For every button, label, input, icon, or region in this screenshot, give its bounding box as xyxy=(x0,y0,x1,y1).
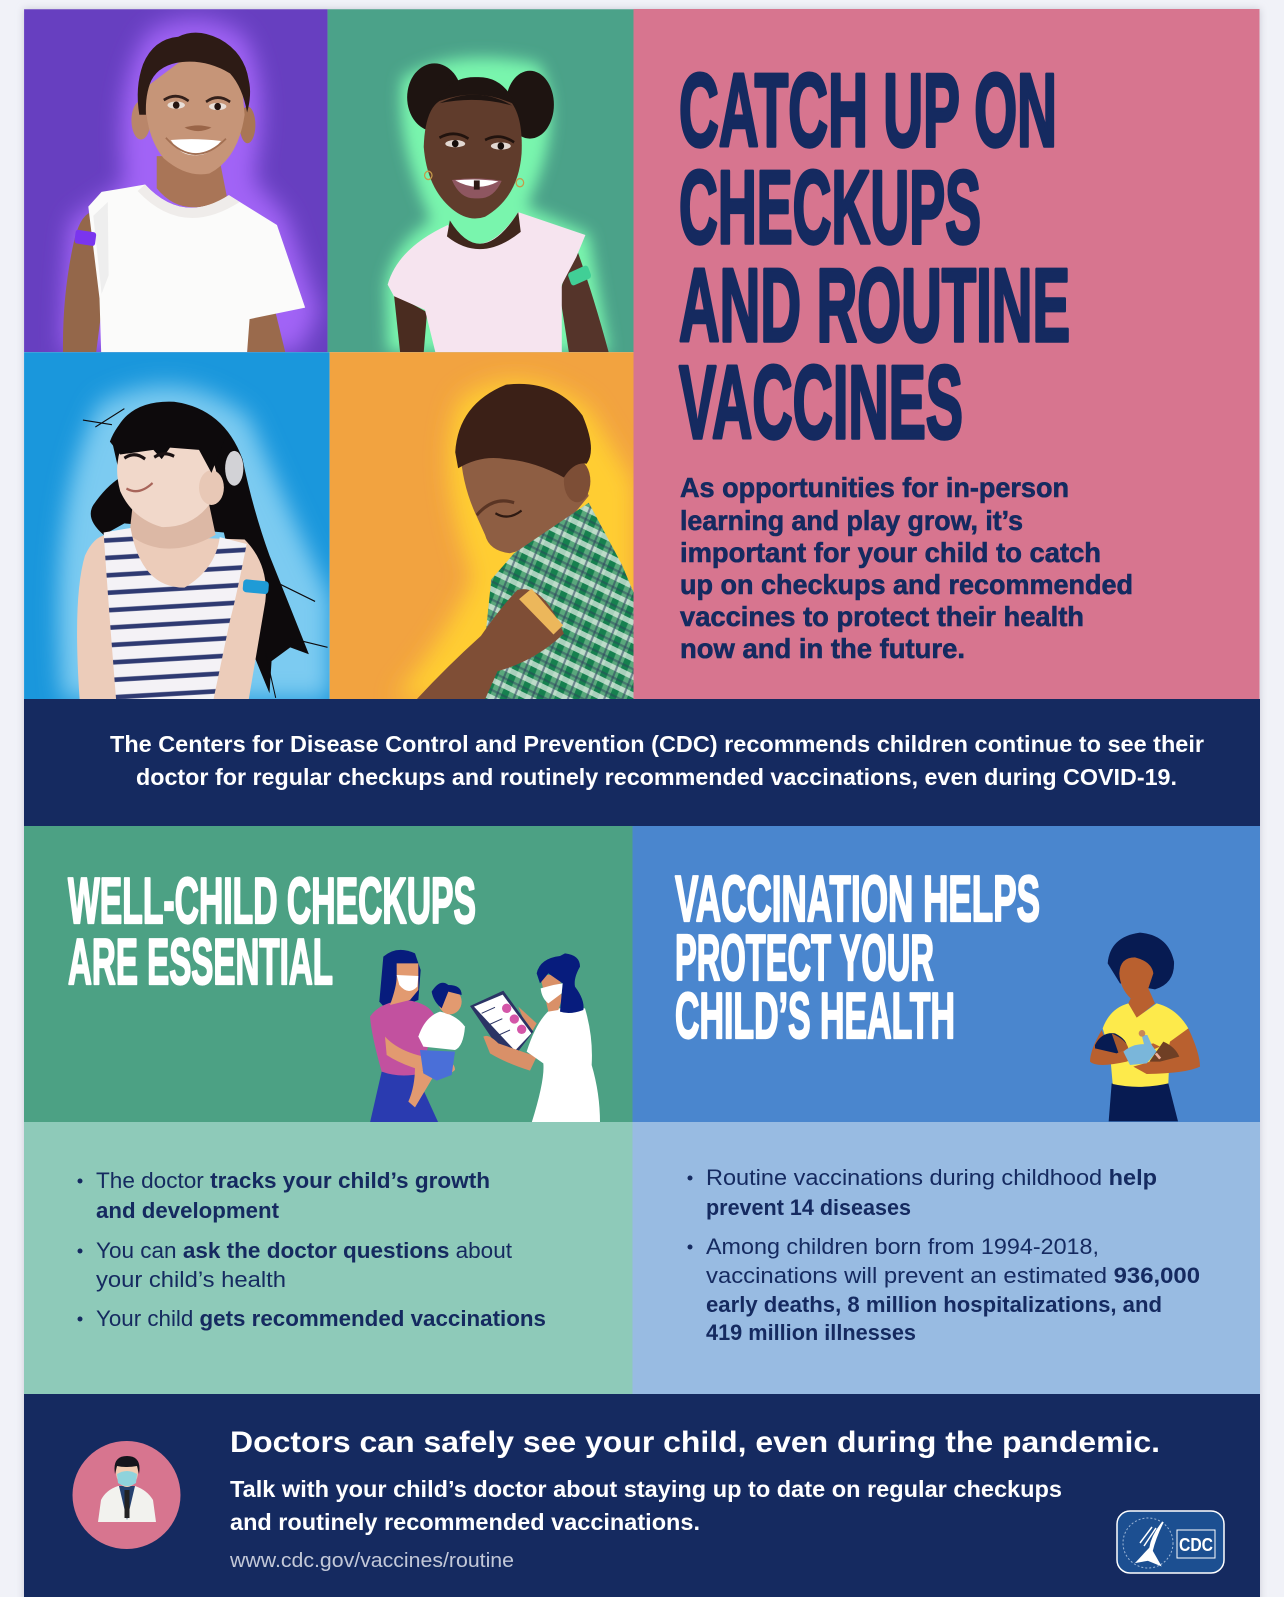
bullet list: checkups: The doctor tracks your child’s growth xyxy=(96,1168,490,1193)
closing message: Talk with your child’s doctor about staying up to date on regular checkups xyxy=(230,1476,1062,1502)
photo: girl with blue bandage xyxy=(24,352,330,699)
bullet list: vaccination: Routine vaccinations during childhood help xyxy=(706,1165,1157,1190)
photo: boy with purple bandage xyxy=(24,9,328,352)
recommendation text xyxy=(110,731,1204,790)
illustration: mother holding baby xyxy=(1090,933,1200,1121)
intro paragraph: learning and play grow, it’s xyxy=(680,505,1023,536)
heading: vaccination helps xyxy=(675,862,1040,1052)
photo: boy with yellow bandage xyxy=(330,352,634,699)
closing message: and routinely recommended vaccinations. xyxy=(230,1509,700,1535)
heading: well-child checkups: WELL-CHILD CHECKUPS xyxy=(68,864,476,937)
panel: CDC recommendation band xyxy=(24,699,1260,826)
closing message xyxy=(230,1476,1062,1535)
bullet list: vaccination: early deaths, 8 million hospitalizations, and xyxy=(706,1292,1162,1317)
panel: footer xyxy=(24,1394,1260,1597)
icon: masked doctor in pink circle xyxy=(72,1441,180,1549)
heading: vaccination helps: CHILD’S HEALTH xyxy=(675,979,955,1052)
recommendation text: doctor for regular checkups and routinely recommended vaccinations, even during COVID-19. xyxy=(136,764,1177,790)
bullet list: vaccination: prevent 14 diseases xyxy=(706,1195,911,1220)
title: VACCINES xyxy=(679,345,963,461)
bullet list: vaccination: Among children born from 1994-2018, xyxy=(706,1234,1099,1259)
panel: pink title background xyxy=(634,9,1260,699)
panel: checkup benefits list xyxy=(24,1122,632,1394)
intro paragraph: important for your child to catch xyxy=(680,537,1101,568)
logo: CDC: CDC xyxy=(1179,1535,1213,1555)
title xyxy=(679,53,1070,461)
heading: vaccination helps: PROTECT YOUR xyxy=(675,921,934,994)
panel: vaccination benefits list xyxy=(632,1122,1260,1394)
bullet list: checkups xyxy=(78,1168,546,1331)
recommendation text: The Centers for Disease Control and Prevention (CDC) recommends children continue to see their xyxy=(110,731,1204,757)
illustration: mother, baby and doctor with clipboard xyxy=(370,950,600,1123)
bullet list: checkups: your child’s health xyxy=(96,1267,286,1292)
photo: girl with green bandage xyxy=(328,9,634,352)
bullet list: checkups: and development xyxy=(96,1198,280,1223)
bullet list: vaccination: vaccinations will prevent an estimated 936,000 xyxy=(706,1263,1200,1288)
bullet list: vaccination: 419 million illnesses xyxy=(706,1320,916,1345)
heading: well-child checkups: ARE ESSENTIAL xyxy=(68,925,333,998)
intro paragraph xyxy=(680,472,1133,664)
intro paragraph: now and in the future. xyxy=(680,633,965,664)
panel: vaccination heading area xyxy=(632,826,1260,1122)
logo: CDC xyxy=(1117,1511,1224,1573)
intro paragraph: vaccines to protect their health xyxy=(680,601,1084,632)
bullet list: checkups: Your child gets recommended vaccinations xyxy=(96,1306,546,1331)
heading: well-child checkups xyxy=(68,864,476,998)
title: CHECKUPS xyxy=(679,150,981,266)
panel: well-child checkups heading area xyxy=(24,826,632,1123)
bullet list: vaccination xyxy=(688,1165,1200,1345)
bullet list: checkups: You can ask the doctor questions about xyxy=(96,1238,512,1263)
panel: children photo grid xyxy=(24,9,634,699)
intro paragraph: up on checkups and recommended xyxy=(680,569,1133,600)
website link: www.cdc.gov/vaccines/routine xyxy=(229,1550,514,1572)
intro paragraph: As opportunities for in-person xyxy=(680,472,1069,503)
closing heading: Doctors can safely see your child, even during the pandemic. xyxy=(230,1426,1160,1459)
